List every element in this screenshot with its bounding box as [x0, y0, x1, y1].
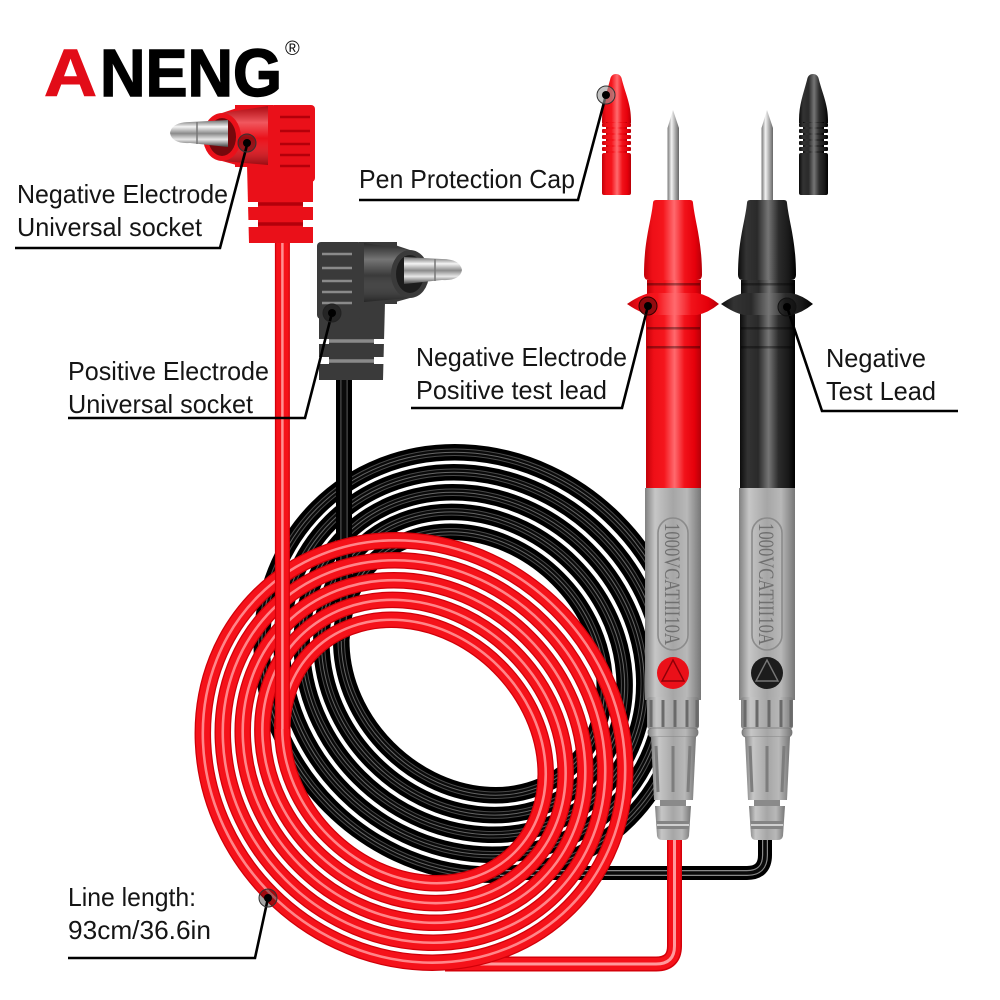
callout: negative electrode universal socket [15, 134, 256, 248]
red vertical wire [275, 240, 290, 729]
callout: negative electrode positive test lead: Negative Electrode [416, 342, 627, 372]
icon: black warning badge [751, 657, 783, 689]
callout: negative electrode positive test lead [411, 297, 657, 408]
black test probe [721, 110, 813, 840]
callout: pen protection cap [359, 86, 615, 200]
callout: positive electrode universal socket [68, 304, 341, 419]
logo: ANENG: A [44, 36, 97, 111]
black lead wire to probe [500, 838, 765, 873]
callout: positive electrode universal socket: Positive Electrode [68, 356, 269, 386]
red wire coil [116, 453, 712, 1000]
logo: ANENG: ® [285, 38, 300, 60]
black test probe: 1000VCATIII10A [754, 523, 779, 645]
logo: ANENG: NENG [100, 36, 282, 111]
icon: red angled socket [170, 105, 315, 243]
callout: line length: 93cm/36.6in [68, 915, 211, 945]
icon: red warning badge [657, 657, 689, 689]
icon: black angled socket [317, 242, 462, 380]
black wire coil [175, 365, 771, 962]
callout: negative electrode positive test lead: Positive test lead [416, 375, 607, 405]
icon: red protection cap [602, 74, 631, 195]
callout: line length: Line length: [68, 882, 196, 912]
icon: black protection cap [799, 74, 828, 195]
callout: negative test lead [778, 298, 958, 411]
red test probe [627, 110, 719, 840]
callout: positive electrode universal socket: Universal socket [68, 389, 254, 419]
callout: pen protection cap: Pen Protection Cap [359, 164, 575, 194]
callout: negative electrode universal socket: Universal socket [17, 212, 203, 242]
red test probe: 1000VCATIII10A [660, 523, 685, 645]
callout: negative electrode universal socket: Negative Electrode [17, 179, 228, 209]
callout: negative test lead: Negative [826, 343, 926, 373]
red lead wire to probe [445, 838, 674, 964]
black vertical wire [341, 378, 344, 641]
callout: line length [68, 882, 277, 958]
callout: negative test lead: Test Lead [826, 376, 936, 406]
